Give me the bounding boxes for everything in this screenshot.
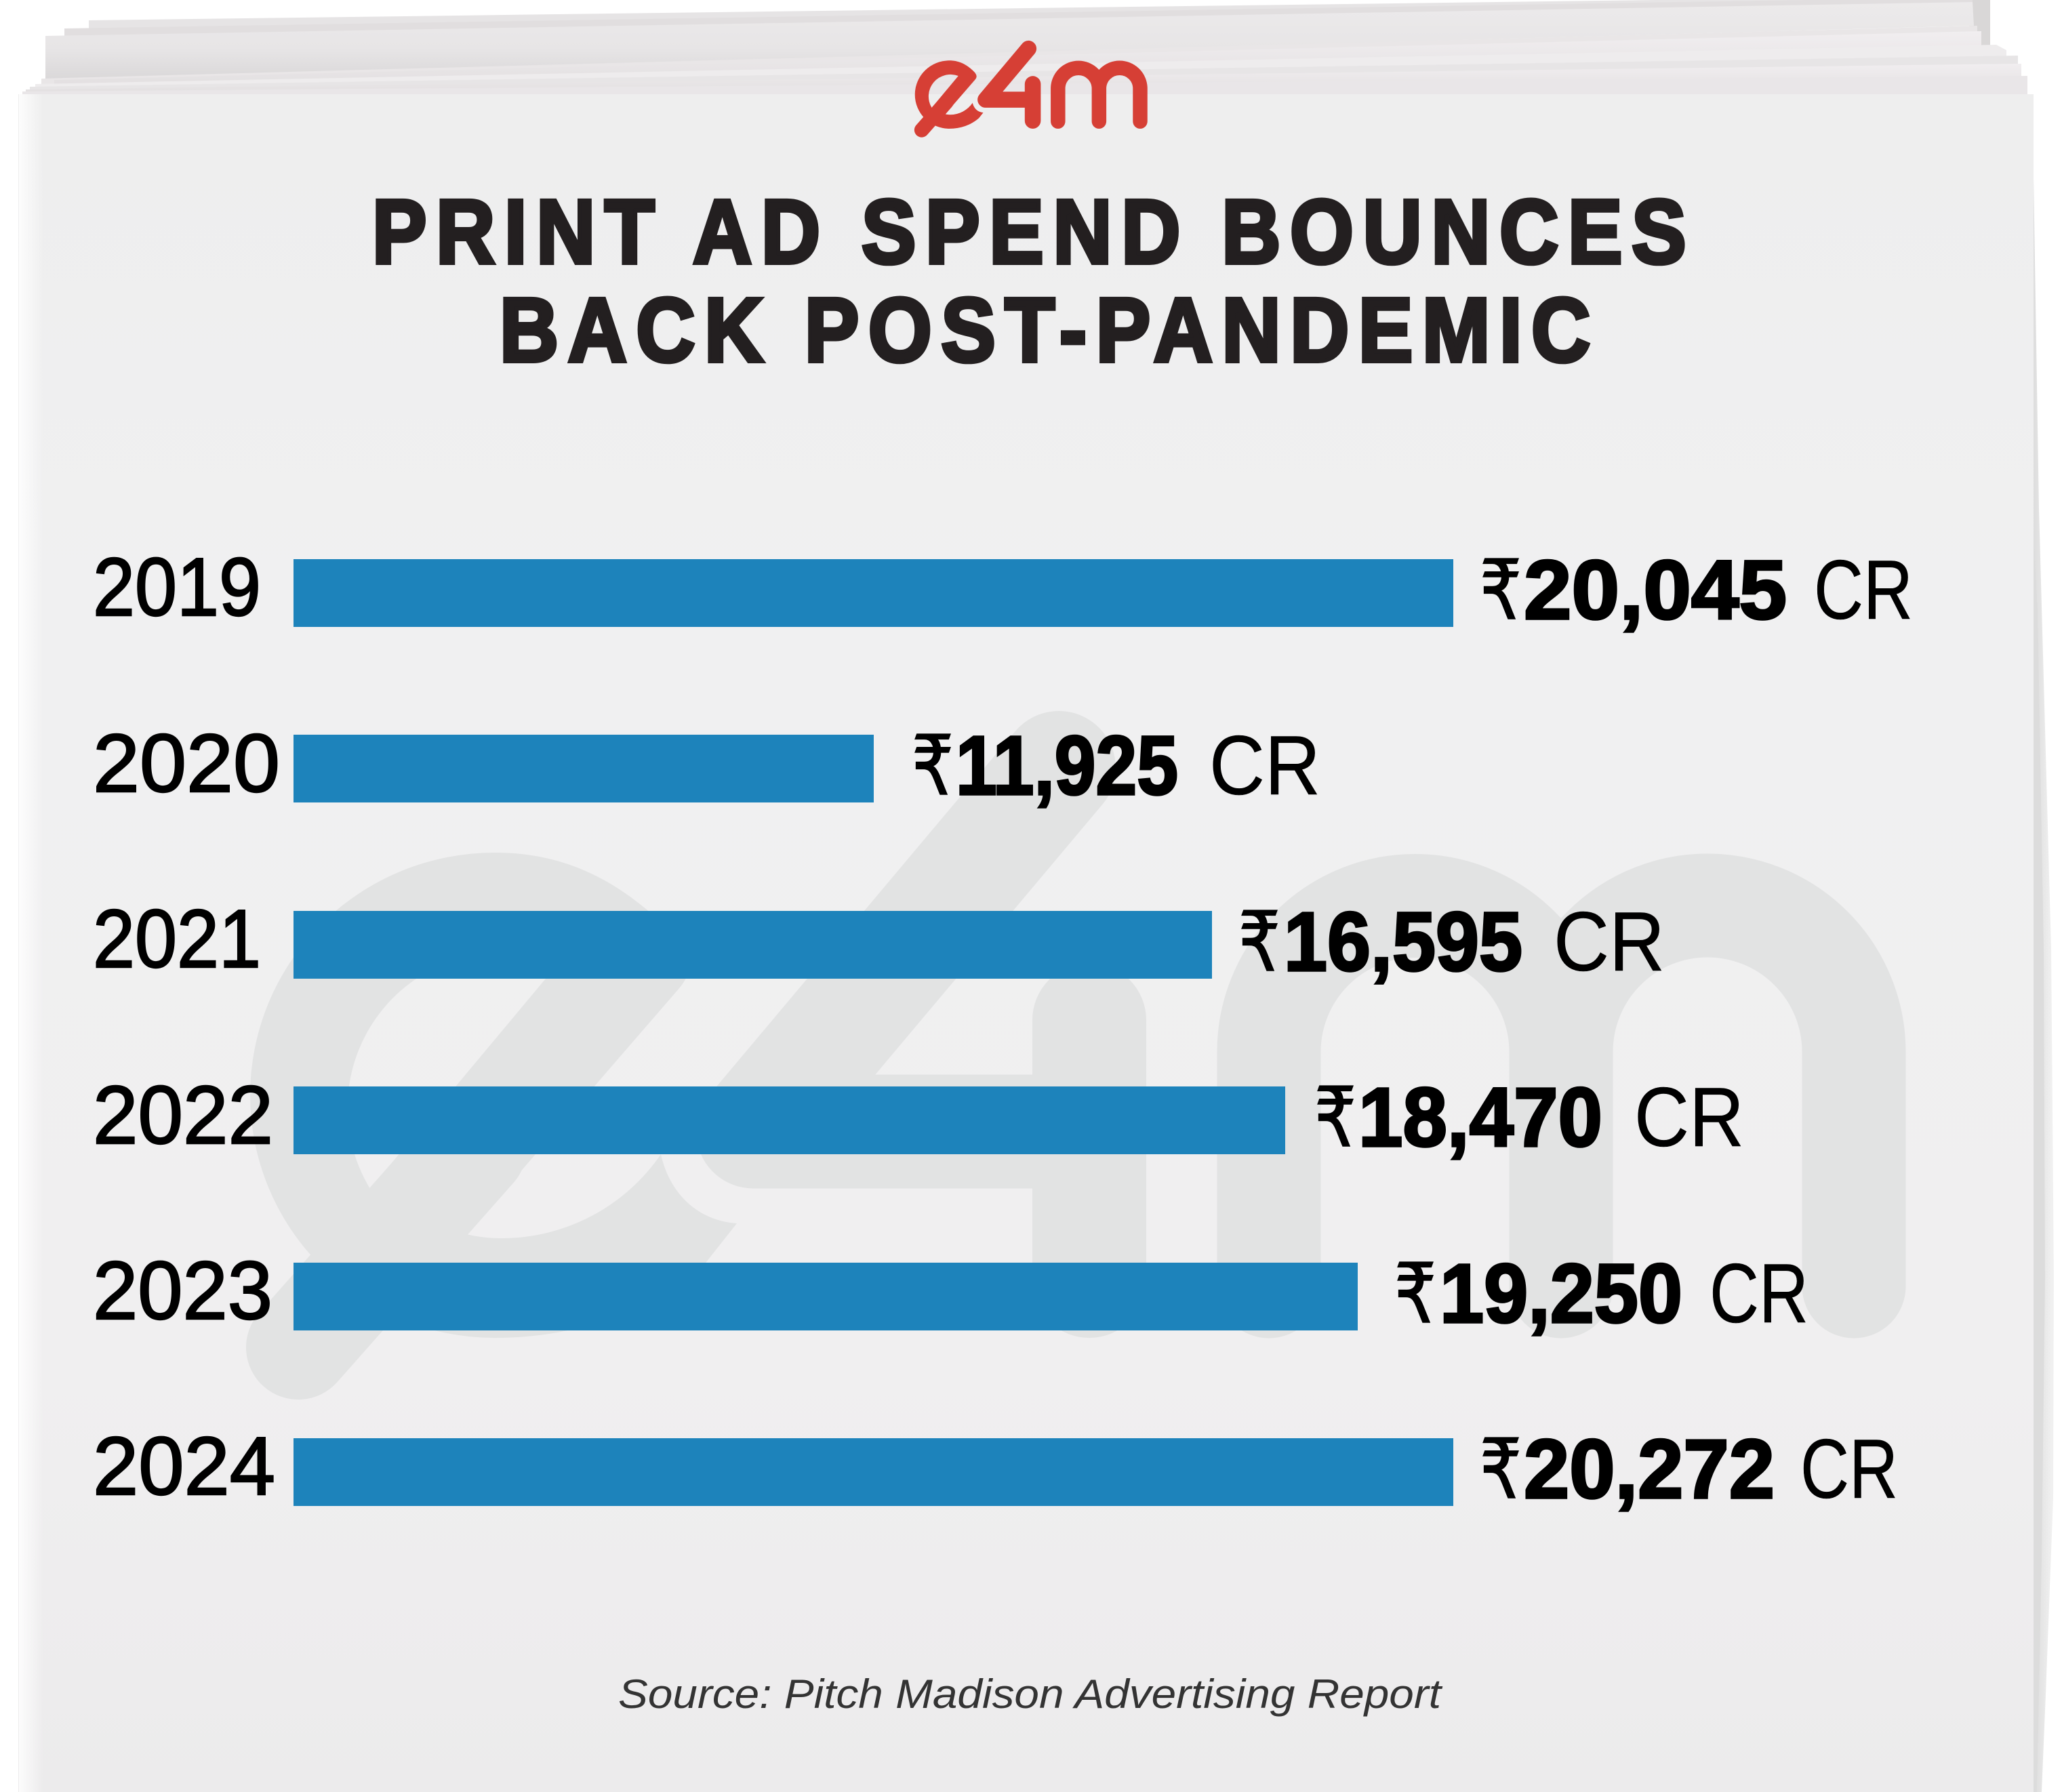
rupee sign: ₹ (1238, 896, 1280, 988)
rupee sign: ₹ (1480, 1423, 1522, 1515)
logo: e4m (915, 49, 1140, 130)
title (372, 182, 1686, 381)
bar (294, 1263, 1358, 1330)
year label: 2022 (93, 1069, 273, 1161)
row 2020 (93, 717, 1320, 813)
top page one (89, 0, 1969, 28)
watermark letter e (250, 853, 737, 1338)
logo letter m (1058, 68, 1140, 121)
bar (294, 559, 1453, 627)
unit: CR (1209, 719, 1320, 813)
rupee sign: ₹ (912, 720, 954, 812)
value: 20,045 (1524, 544, 1787, 637)
year label: 2023 (93, 1244, 272, 1337)
rupee sign: ₹ (1394, 1248, 1436, 1340)
logo numeral 4 (986, 49, 1033, 121)
source note: Source: Pitch Madison Advertising Report (618, 1671, 1443, 1717)
year label: 2024 (93, 1420, 275, 1512)
watermark e tail (298, 1148, 474, 1347)
page stack corner shadow (1969, 0, 1990, 47)
bar (294, 735, 874, 802)
watermark numeral 4 (753, 768, 1089, 1281)
watermark: e4m logo (250, 768, 1854, 1347)
row 2023 (93, 1244, 1808, 1341)
year label: 2019 (93, 541, 261, 633)
rupee sign: ₹ (1480, 544, 1522, 636)
inner back page (2027, 407, 2045, 1792)
left edge highlight (19, 94, 43, 1792)
value: 18,470 (1358, 1072, 1602, 1164)
rupee sign: ₹ (1314, 1072, 1356, 1164)
bar (294, 1438, 1453, 1506)
unit: CR (1800, 1423, 1898, 1516)
bar chart (93, 541, 1913, 1516)
bar (294, 1086, 1285, 1154)
value: 20,272 (1524, 1423, 1775, 1516)
thin page layer (41, 26, 1977, 85)
value: 16,595 (1284, 896, 1522, 989)
thin page layer three (30, 56, 2018, 92)
title line one: PRINT AD SPEND BOUNCES (372, 182, 1686, 283)
page layer five (22, 76, 2027, 94)
logo e tail (922, 102, 946, 130)
unit: CR (1710, 1247, 1808, 1341)
top page two (64, 0, 1973, 37)
page layer (54, 31, 1981, 88)
value: 19,250 (1440, 1248, 1682, 1341)
unit: CR (1554, 895, 1665, 989)
back pages at right edge (2027, 136, 2054, 1792)
title line two: BACK POST-PANDEMIC (500, 280, 1590, 381)
row 2024 (93, 1420, 1898, 1516)
thin page layer two (35, 45, 2006, 91)
unit: CR (1634, 1071, 1744, 1164)
year label: 2021 (93, 893, 261, 985)
large curled page (45, 2, 1974, 79)
value: 11,925 (956, 720, 1178, 813)
bar (294, 911, 1212, 979)
watermark letter m (1269, 905, 1854, 1286)
unit: CR (1814, 544, 1913, 637)
year label: 2020 (93, 717, 280, 809)
logo letter e (915, 60, 984, 129)
row 2019 (93, 541, 1913, 637)
row 2021 (93, 893, 1665, 989)
row 2022 (93, 1069, 1744, 1164)
page layer four (26, 64, 2021, 94)
